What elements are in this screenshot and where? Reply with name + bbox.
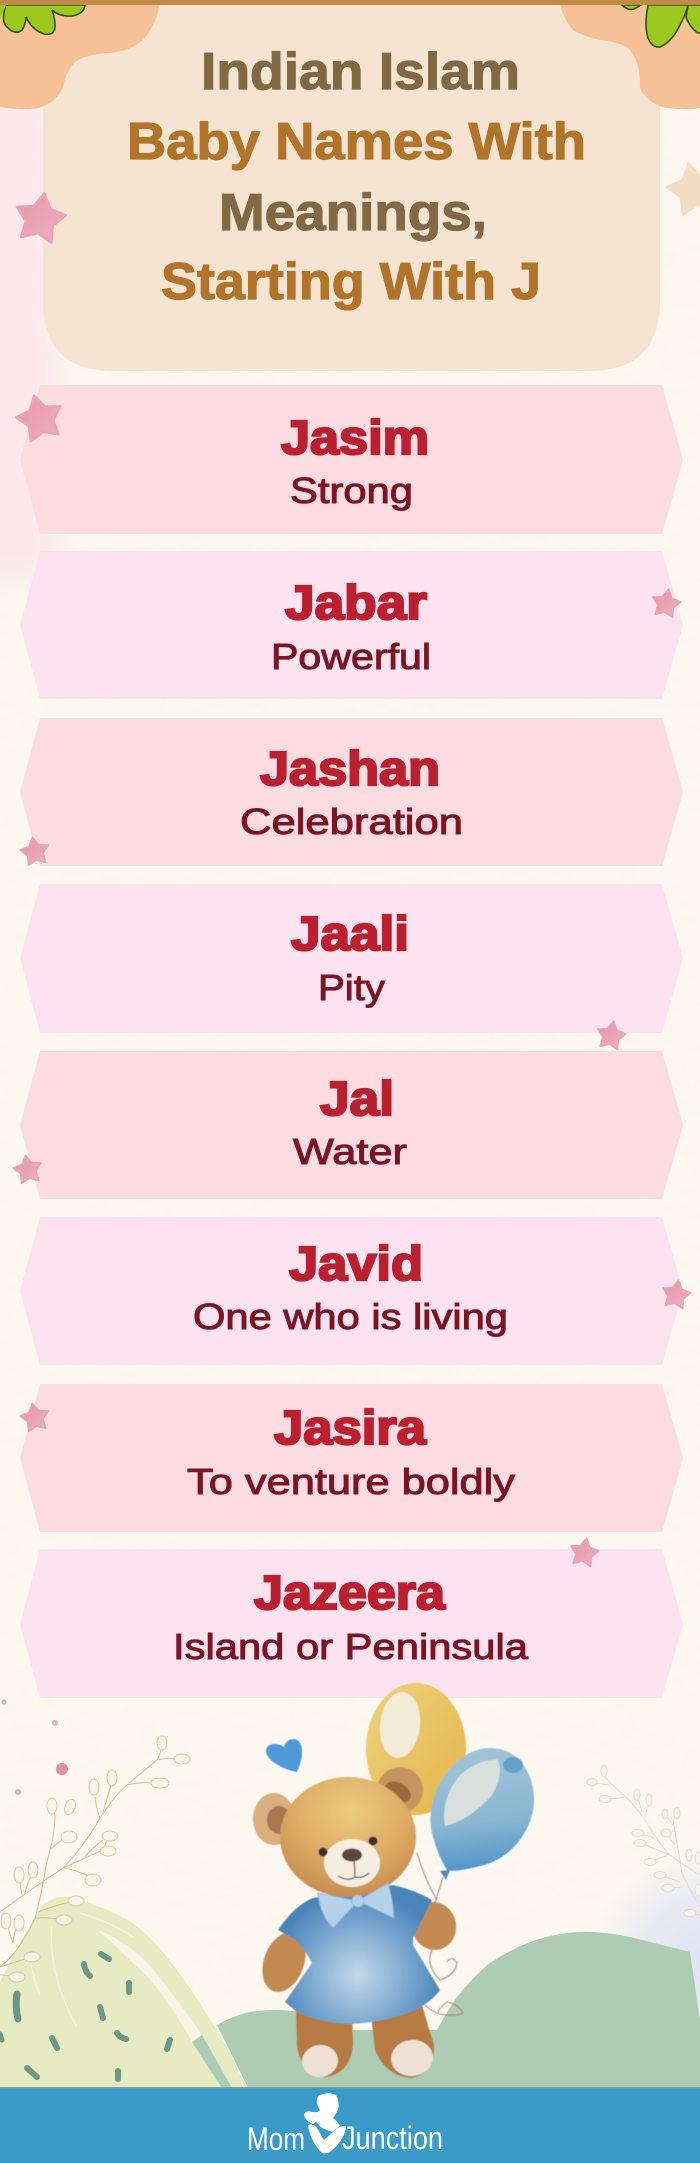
bear arms [255,1898,461,1998]
branch: left [0,1736,190,1982]
star [12,390,67,443]
card: Jal: Water [293,1131,407,1172]
bear muzzle [324,1839,380,1887]
balloon strings [417,1853,463,2015]
star [11,1153,44,1184]
logo text: Mom [247,2121,305,2157]
card: Jasim: Jasim [281,412,429,465]
card: Jaali: Jaali [291,908,409,961]
icon: leaves right [622,5,700,47]
logo text: Junction [342,2120,443,2156]
bear feet [300,2037,435,2079]
corner blob: right [560,5,700,109]
hill: green right [217,1932,700,2088]
card: Javid [20,1217,683,1365]
star [18,1401,51,1432]
top bar [0,0,700,5]
card: Jaali: Pity [318,967,385,1008]
corner blob: left [0,5,159,109]
card: Jazeera [20,1549,683,1698]
card: Jazeera: Jazeera [254,1567,445,1620]
star [18,835,51,866]
icon: blue heart [266,1739,302,1772]
bear right ear [377,1767,423,1813]
branch: right [587,1765,700,1916]
card: Jasira: Jasira [274,1402,426,1455]
logo text [247,2120,443,2157]
hill: pale left [0,1897,247,2088]
title: Meanings, [219,184,487,242]
hill dashes [0,1954,170,2079]
card: Javid: Javid [289,1238,423,1291]
card: Jabar: Jabar [285,577,427,630]
blue balloon [430,1748,534,1880]
card: Jasim: Strong [290,470,413,511]
title [127,43,586,311]
card: Jazeera: Island or Peninsula [173,1626,529,1667]
decorative star beige [663,158,700,217]
bear left ear [253,1793,295,1845]
confetti dots [2,1700,68,1795]
bear face [318,1836,378,1879]
card: Jashan [20,718,683,866]
yellow balloon [366,1683,466,1815]
title panel [43,5,660,371]
card: Jaali [20,884,683,1033]
hill green sliver [192,2035,232,2088]
star [568,1536,601,1567]
card: Jabar: Powerful [271,636,431,677]
logo: heart [308,2124,346,2153]
card: Javid: One who is living [193,1296,508,1337]
footer [0,2087,700,2163]
card: Jashan: Jashan [260,743,440,796]
star [595,1019,628,1050]
star [660,1278,693,1309]
title: Baby Names With [127,113,586,171]
card: Jal: Jal [320,1073,394,1126]
illustration: teddy bear with balloons [253,1683,534,2079]
hill cream band [98,1930,202,2042]
hill highlights [30,1913,133,2027]
logo: mother silhouette [304,2093,340,2132]
bear head [280,1777,416,1897]
title: Starting With J [161,253,541,311]
title: Indian Islam [201,43,520,101]
star [650,587,683,618]
card: Jal [20,1051,683,1199]
card: Jasim [20,385,683,534]
card: Jashan: Celebration [240,801,463,842]
blue dress [278,1885,440,2024]
bow [318,1883,394,1928]
icon: leaves left [0,5,85,34]
card: Jasira: To venture boldly [187,1461,515,1502]
bear legs [296,2005,434,2078]
card: Jasira [20,1384,683,1532]
star [12,189,69,244]
card: Jabar [20,551,683,699]
